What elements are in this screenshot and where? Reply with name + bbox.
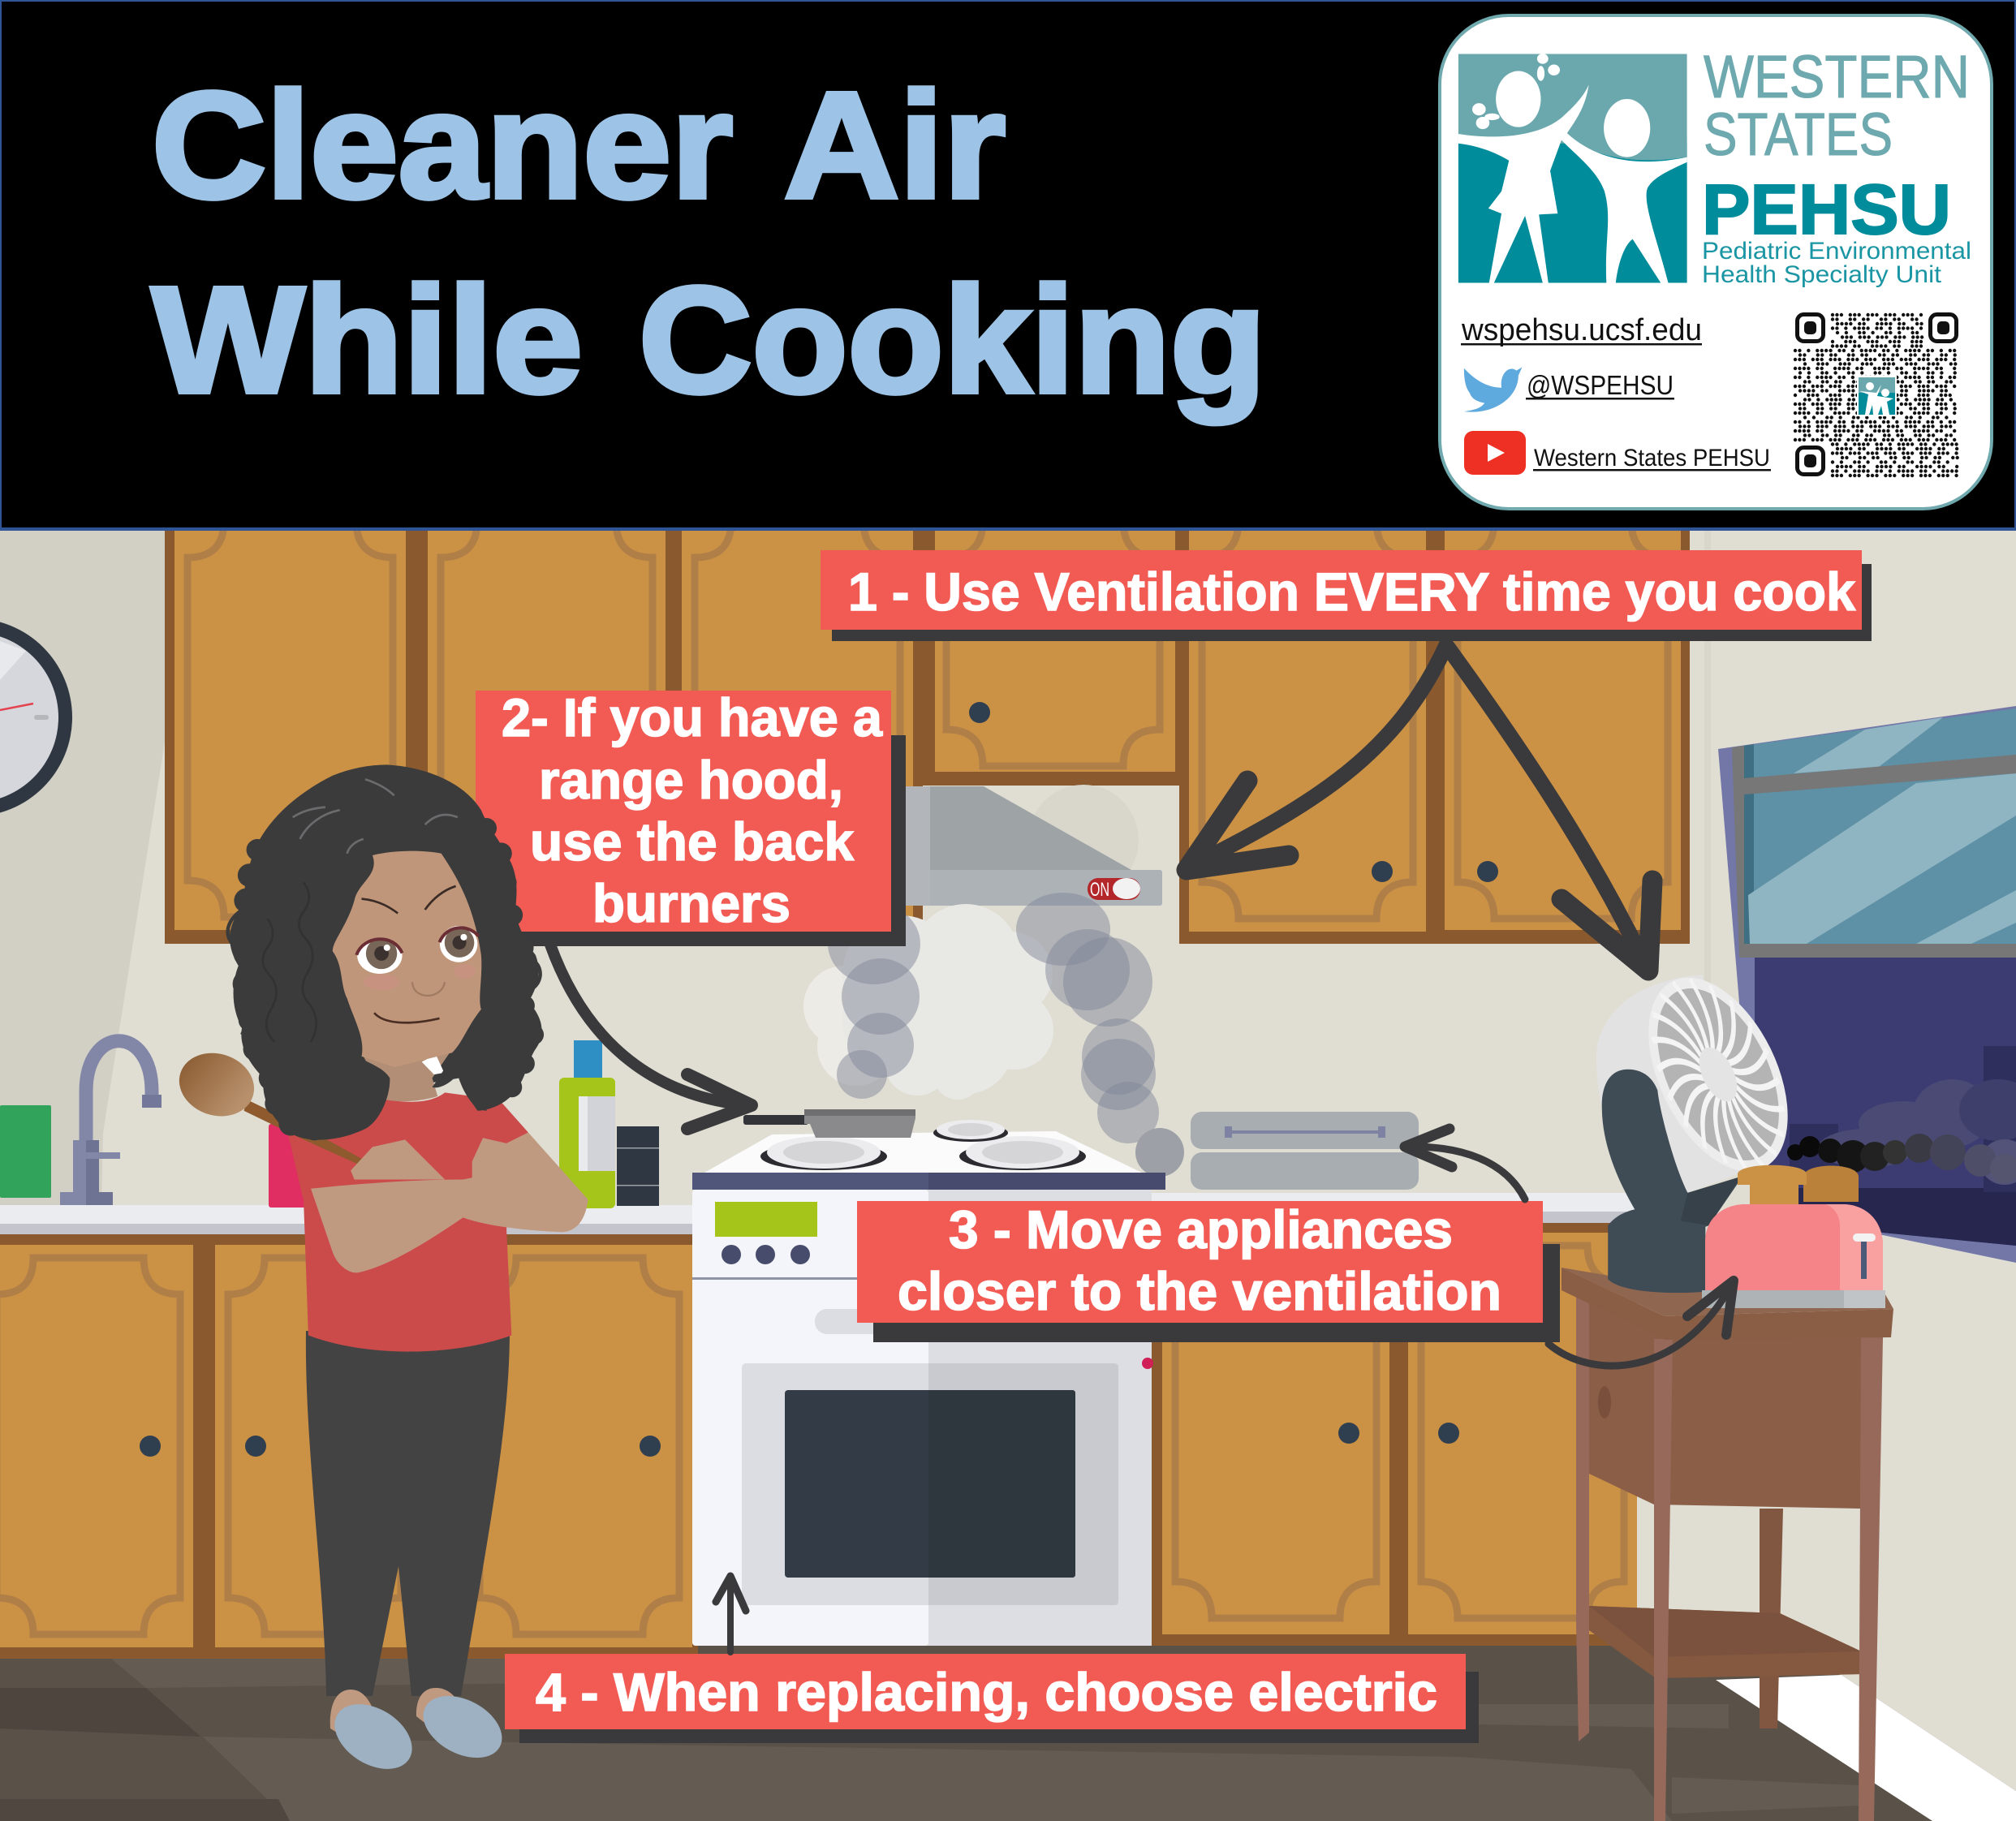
header banner	[0, 0, 2016, 531]
callout 2: range hood tip: 2- If you have a	[502, 687, 883, 747]
cooking smoke plumes	[828, 893, 1184, 1177]
front hair locks	[343, 1037, 487, 1129]
floor	[0, 1611, 2016, 1821]
upper cabinets	[165, 519, 1690, 944]
feet and slippers	[323, 1683, 512, 1782]
callout 2: range hood tip: use the back	[530, 811, 854, 872]
oven door	[742, 1363, 1118, 1605]
QR center logo	[1857, 376, 1897, 416]
icon: youtube	[1464, 431, 1526, 475]
wall clock	[0, 618, 72, 816]
hair	[228, 764, 544, 1140]
arrow: callout 1 to range hood switch	[1187, 645, 1446, 870]
wooden spoon	[171, 1044, 364, 1165]
logo: two children	[1458, 54, 1687, 283]
shirt	[287, 1092, 528, 1352]
arrow: callout 3 to toaster	[1549, 1281, 1734, 1366]
title: Cooking	[639, 256, 1266, 424]
organization name: Pediatric Environmental	[1702, 238, 1971, 265]
woman with crossed arms and wooden spoon	[171, 764, 588, 1782]
kitchen background wall	[0, 527, 2016, 1821]
arrow: callout 2 to back burner	[550, 945, 752, 1129]
callout 4: choose electric tip	[505, 1654, 1479, 1743]
title	[152, 62, 1266, 424]
organization name: PEHSU	[1702, 170, 1951, 249]
callout 2: range hood tip	[476, 687, 906, 946]
title: While	[152, 256, 583, 424]
neck	[364, 1049, 452, 1101]
stove	[692, 1109, 1165, 1646]
ON switch	[1088, 878, 1140, 901]
arrow: callout 4 to stove	[716, 1576, 746, 1652]
website link: wspehsu.ucsf.edu	[1461, 313, 1702, 347]
face	[333, 851, 481, 1067]
side table	[1562, 1268, 1893, 1821]
pink box on counter	[269, 1124, 317, 1208]
callout 3: move appliances tip	[857, 1199, 1560, 1342]
countertops	[0, 1193, 1648, 1234]
white steam cloud	[803, 904, 1053, 1100]
icon: toaster with toast	[1702, 1165, 1885, 1308]
eyes	[356, 926, 479, 974]
crossed arms	[311, 1133, 588, 1272]
callout 4: choose electric tip: 4 - When replacing, choose electric	[536, 1662, 1437, 1722]
twitter handle: @WSPEHSU	[1527, 370, 1674, 400]
icon: faucet	[60, 1041, 162, 1205]
range hood with smoke behind	[906, 785, 1162, 906]
callout 2: range hood tip: range hood,	[539, 750, 843, 810]
ON switch: ON	[1090, 879, 1109, 901]
title: Cleaner	[152, 62, 733, 230]
callout 2: range hood tip: burners	[592, 873, 790, 933]
icon: twitter bird	[1464, 367, 1522, 412]
window with night view	[1718, 706, 2016, 1263]
smoke outside window	[1787, 1079, 2016, 1185]
youtube channel name: Western States PEHSU	[1534, 445, 1770, 471]
eyebrows, nose, mouth, cheeks	[362, 886, 476, 1022]
QR code	[1795, 315, 1958, 476]
pan	[743, 1109, 915, 1138]
lower cabinets	[0, 1223, 1637, 1659]
gray appliance on counter	[1191, 1112, 1419, 1190]
callout 1: ventilation tip: 1 - Use Ventilation EVERY time you cook	[848, 562, 1855, 622]
title: Air	[784, 62, 1006, 230]
pants	[306, 1331, 510, 1696]
icon: desk fan	[1596, 955, 1816, 1293]
callout 1: ventilation tip	[821, 550, 1872, 641]
contact card	[1440, 15, 1992, 509]
organization name: STATES	[1704, 101, 1893, 168]
hair highlights	[293, 779, 458, 854]
callout 3: move appliances tip: closer to the ventilation	[898, 1261, 1501, 1321]
callout 3: move appliances tip: 3 - Move appliances	[949, 1199, 1453, 1259]
organization name	[1702, 43, 1971, 288]
arrow: callout 3 to gray appliance	[1405, 1129, 1525, 1199]
arrow: callout 1 to fan	[1446, 645, 1652, 971]
green box on counter	[0, 1105, 51, 1198]
organization name: Health Specialty Unit	[1702, 261, 1942, 288]
bottle and can on counter	[559, 1040, 659, 1208]
organization name: WESTERN	[1704, 43, 1970, 110]
